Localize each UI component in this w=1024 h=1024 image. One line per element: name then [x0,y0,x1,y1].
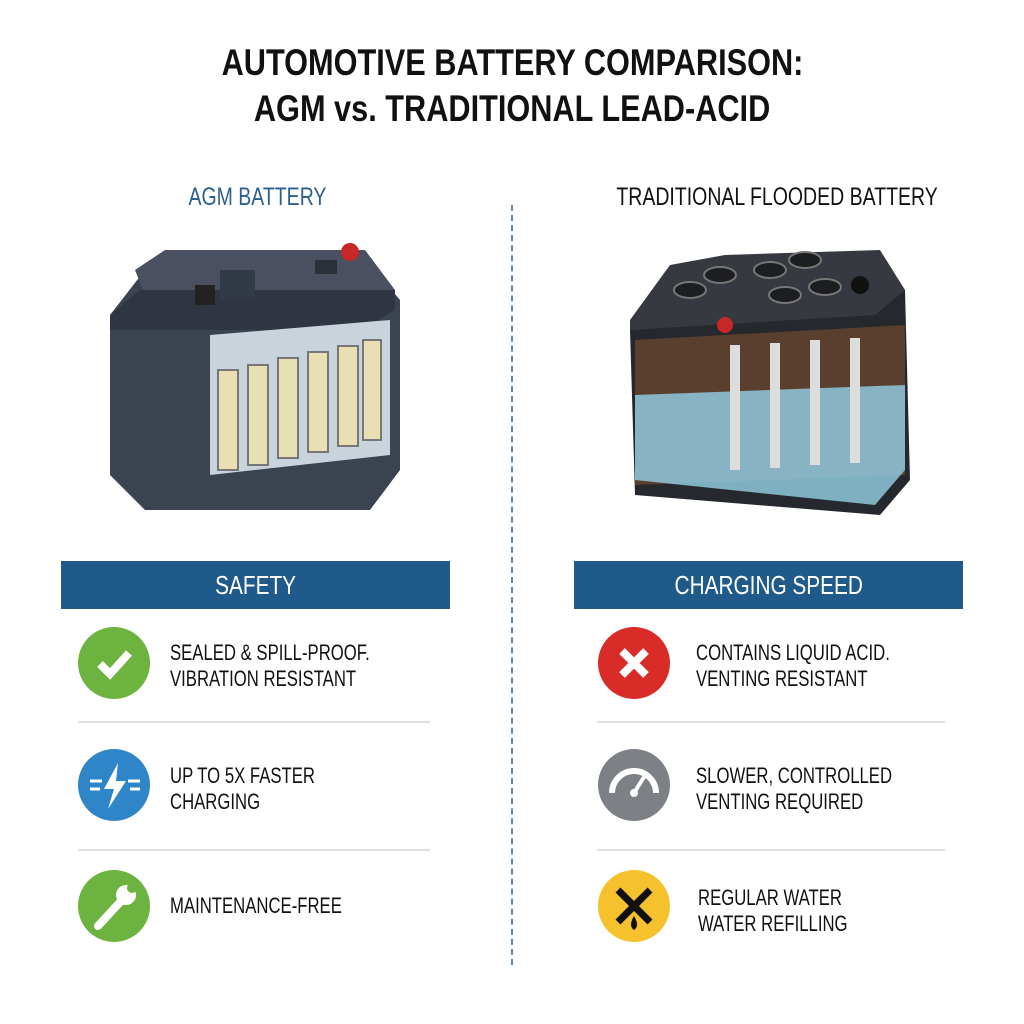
text: slower [696,763,892,814]
text: liquid acid [696,640,890,691]
banner: safety: SAFETY [215,570,296,600]
icon: tools [598,870,670,942]
text: sealed: VIBRATION RESISTANT [170,666,356,691]
text: liquid acid: CONTAINS LIQUID ACID. [696,640,890,665]
text: maintenance-free: MAINTENANCE-FREE [170,893,342,918]
text: slower: VENTING REQUIRED [696,789,863,814]
text: faster charging: UP TO 5X FASTER [170,763,315,788]
divider: dashed center line [511,205,513,965]
subheading: AGM: AGM BATTERY [188,183,326,211]
text: water refilling: WATER REFILLING [698,911,848,936]
banner: charging speed: CHARGING SPEED [674,570,863,600]
text: sealed: SEALED & SPILL-PROOF. [170,640,370,665]
text: water refilling: REGULAR WATER [698,885,842,910]
title: AGM vs. TRADITIONAL LEAD-ACID [254,88,770,129]
banner: safety [61,561,450,609]
text: faster charging [170,763,315,814]
icon: check [78,627,150,699]
text: slower: SLOWER, CONTROLLED [696,763,892,788]
title: AUTOMOTIVE BATTERY COMPARISON: [221,42,803,83]
subheading: flooded: TRADITIONAL FLOODED BATTERY [616,183,938,211]
banner: charging speed [574,561,963,609]
title [221,42,803,129]
icon: x [598,627,670,699]
icon: lightning [78,749,150,821]
illustration: flooded battery [630,250,910,515]
text: water refilling [698,885,848,936]
text: sealed [170,640,370,691]
icon: gauge [598,749,670,821]
icon: wrench [78,870,150,942]
illustration: AGM battery [110,243,400,510]
text: faster charging: CHARGING [170,789,260,814]
text: liquid acid: VENTING RESISTANT [696,666,868,691]
